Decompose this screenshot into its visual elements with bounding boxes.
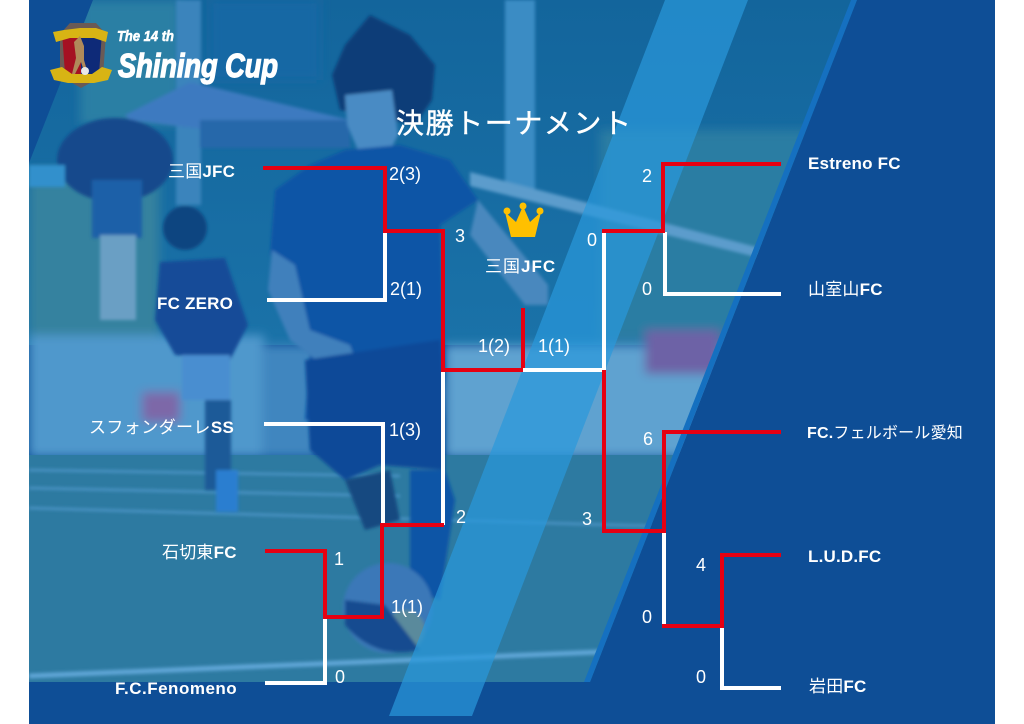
score: 2(3): 2(3) xyxy=(389,164,421,184)
team: FC ZERO: FC ZERO xyxy=(157,294,233,313)
title: 決勝トーナメント xyxy=(396,108,631,139)
team: 石切東FC: 石切東FC xyxy=(162,543,237,562)
scores xyxy=(334,164,706,687)
team: 三国JFC: 三国JFC xyxy=(168,162,235,181)
emblem: crest xyxy=(50,23,112,88)
bracket: right side xyxy=(523,164,781,688)
icon: winner crown xyxy=(504,202,544,237)
logo text: The 14 th: The 14 th xyxy=(117,28,174,45)
score: right 4: 4 xyxy=(696,555,706,575)
team: 岩田FC: 岩田FC xyxy=(809,677,866,696)
bracket lines: winners right xyxy=(602,164,781,626)
score: 1(1): 1(1) xyxy=(391,597,423,617)
score: 1(3): 1(3) xyxy=(389,420,421,440)
score: right 0: 0 xyxy=(642,607,652,627)
background photo: soccer player xyxy=(29,0,859,685)
score: 3: 3 xyxy=(455,226,465,246)
team: スフォンダーレSS: スフォンダーレSS xyxy=(89,418,234,437)
score: right 2: 2 xyxy=(642,166,652,186)
logo block xyxy=(50,23,278,88)
score: 1: 1 xyxy=(334,549,344,569)
team labels: left xyxy=(89,162,237,698)
score: 1(2): 1(2) xyxy=(478,336,510,356)
score: 1(1) centre: 1(1) xyxy=(538,336,570,356)
team: F.C.Fenomeno: F.C.Fenomeno xyxy=(115,679,237,698)
bracket lines: losers right xyxy=(523,232,781,688)
score: right 0: 0 xyxy=(642,279,652,299)
bracket: left side xyxy=(263,168,523,683)
score: right 0: 0 xyxy=(587,230,597,250)
score: 0: 0 xyxy=(335,667,345,687)
photo right edge highlight xyxy=(584,0,857,682)
score: right 6: 6 xyxy=(643,429,653,449)
logo text: Shining Cup: Shining Cup xyxy=(118,47,278,84)
score: right 0: 0 xyxy=(696,667,706,687)
team: L.U.D.FC: L.U.D.FC xyxy=(808,547,881,566)
score: right 3: 3 xyxy=(582,509,592,529)
score: 2: 2 xyxy=(456,507,466,527)
team labels: right xyxy=(807,154,963,696)
champion label: 三国JFC xyxy=(485,257,556,276)
far player xyxy=(163,206,207,250)
score: 2(1): 2(1) xyxy=(390,279,422,299)
bracket lines: losers left xyxy=(264,232,443,683)
team: FC.フェルボール愛知: FC.フェルボール愛知 xyxy=(807,424,963,442)
grass xyxy=(29,455,676,682)
team: Estreno FC: Estreno FC xyxy=(808,154,901,173)
team: 山室山FC: 山室山FC xyxy=(808,280,883,299)
poles and tent xyxy=(176,0,201,205)
light blue diagonal band xyxy=(389,0,857,716)
main player xyxy=(268,15,548,653)
bracket lines: winners left xyxy=(263,168,523,617)
